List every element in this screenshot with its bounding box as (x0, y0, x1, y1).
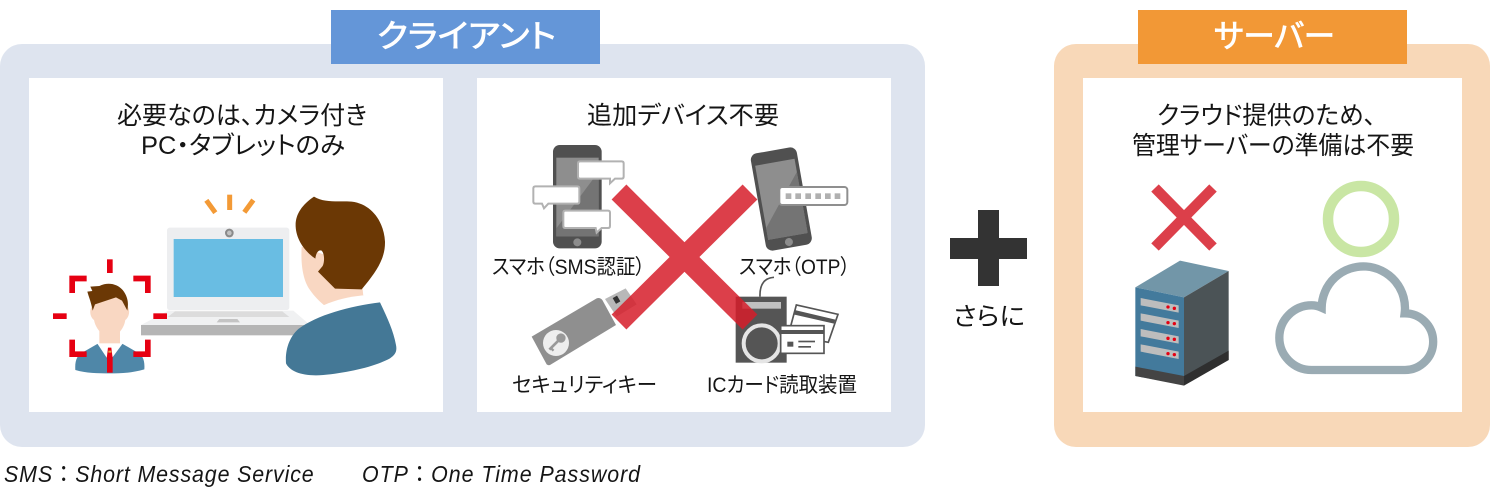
heading: camera PC only (117, 102, 367, 160)
icon: smartphone with SMS bubbles (533, 145, 624, 248)
label: SMS smartphone: スマホ（SMS認証） (492, 256, 645, 279)
icon: small red cross (1155, 188, 1213, 247)
icon: laptop with camera (141, 195, 310, 335)
heading: camera PC only: PC・タブレットのみ (141, 132, 345, 160)
heading: cloud delivery: 管理サーバーの準備は不要 (1132, 132, 1414, 160)
footnote: abbreviations: OTP：One Time Password (362, 461, 641, 487)
icon: large red cross (619, 192, 750, 322)
heading: cloud delivery: クラウド提供のため、 (1157, 102, 1376, 130)
panel: client (0, 10, 925, 447)
icon: small face with recognition frame (53, 259, 167, 373)
footnote: abbreviations: SMS：Short Message Service (4, 461, 314, 487)
icon: camera flash lines (206, 195, 253, 213)
icon: green circle (1328, 186, 1394, 252)
icon: man viewed from behind (286, 197, 396, 375)
client header (331, 10, 600, 64)
label: security key: セキュリティキー (512, 374, 657, 397)
footnote: abbreviations (4, 461, 641, 487)
label: OTP smartphone: スマホ（OTP） (739, 256, 850, 279)
heading: camera PC only: 必要なのは、カメラ付き (117, 102, 367, 130)
heading: no extra device: 追加デバイス不要 (587, 102, 779, 130)
client header: クライアント (377, 18, 556, 54)
heading: cloud delivery (1132, 102, 1414, 160)
icon: cloud (1279, 266, 1433, 370)
label: IC card reader: ICカード読取装置 (707, 374, 857, 397)
server header: サーバー (1214, 18, 1335, 54)
icon: security key (532, 288, 637, 365)
icon: IC card reader (736, 277, 838, 363)
server header (1138, 10, 1407, 64)
icon: server tower (1135, 261, 1229, 386)
plus sign with caption (950, 210, 1027, 331)
plus sign with caption: さらに (953, 303, 1025, 331)
icon: smartphone with OTP (750, 146, 847, 252)
panel: server (1054, 10, 1490, 447)
